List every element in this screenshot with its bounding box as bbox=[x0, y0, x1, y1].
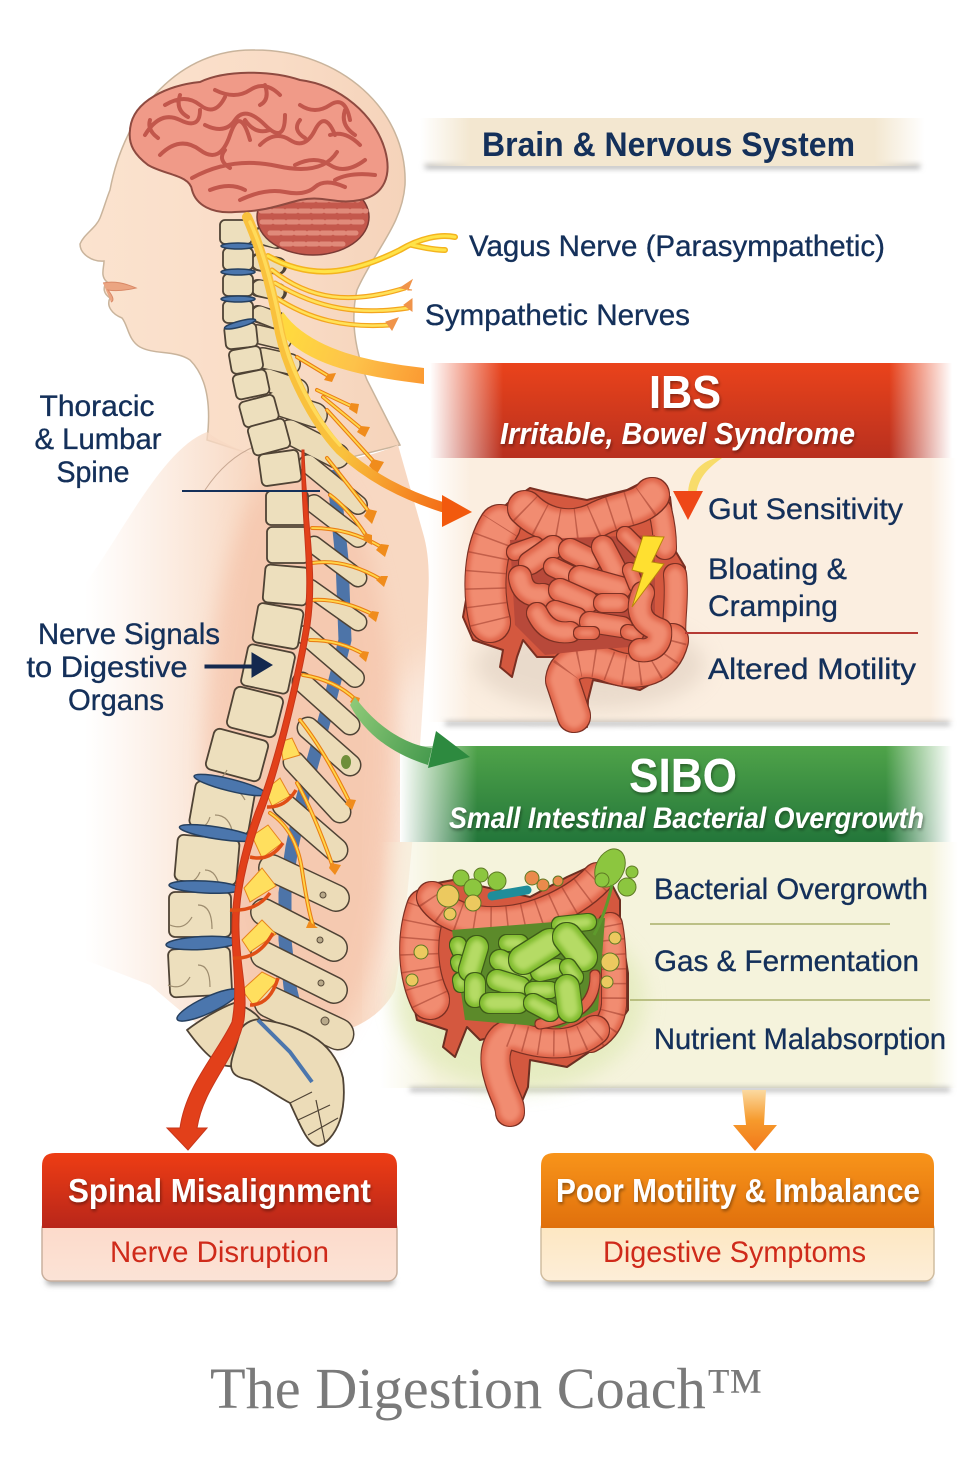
header shadow bbox=[425, 165, 920, 168]
bacteria loops bbox=[458, 922, 588, 1012]
symptom: cramping: Cramping bbox=[708, 590, 838, 623]
callout shadow bbox=[46, 1276, 394, 1285]
divider bbox=[685, 632, 918, 634]
lips bbox=[103, 282, 136, 302]
small intestine loops bbox=[515, 535, 660, 650]
IBS panel body bbox=[428, 458, 956, 722]
label: nerve signals: to Digestive bbox=[26, 651, 188, 684]
label: nerve signals: Organs bbox=[68, 684, 164, 717]
shoulder contour bbox=[205, 440, 280, 490]
label: thoracic and lumbar spine: Spine bbox=[56, 456, 130, 489]
IBS list bbox=[708, 493, 916, 686]
label: nerve signals: Nerve Signals bbox=[38, 618, 220, 651]
brain bbox=[130, 73, 388, 255]
arrow head to intestine bbox=[442, 495, 472, 527]
symptom: bacterial overgrowth: Bacterial Overgrowth bbox=[654, 873, 928, 906]
callout title: Poor Motility & Imbalance bbox=[556, 1172, 920, 1209]
symptom: bloating and cramping: Bloating & bbox=[708, 553, 847, 586]
dividers bbox=[630, 924, 930, 1000]
right torso fade bbox=[380, 640, 440, 1040]
thoracic nerve branches bbox=[270, 357, 383, 925]
icon: lightning bolt bbox=[632, 536, 664, 607]
panel: brain header bbox=[420, 118, 925, 168]
SIBO header fade bbox=[400, 746, 952, 842]
leader line: spine bbox=[182, 490, 320, 492]
main nerve arrow to IBS bbox=[247, 217, 442, 507]
intestine silhouette bbox=[463, 480, 685, 730]
process foramina bbox=[317, 892, 329, 1025]
SIBO title: SIBO bbox=[629, 750, 737, 803]
spinous process fill bbox=[257, 236, 358, 1034]
callout header bbox=[42, 1153, 397, 1228]
callout: spinal misalignment bbox=[42, 1153, 397, 1285]
large intestine frame bbox=[485, 495, 676, 716]
symptom: gut sensitivity: Gut Sensitivity bbox=[708, 493, 903, 526]
spinous processes bbox=[257, 236, 358, 1034]
SIBO panel shadow bbox=[410, 1088, 950, 1091]
spinal canal blue cord bbox=[285, 470, 345, 1020]
vertebra surface cracks bbox=[168, 770, 245, 987]
sympathetic nerve fibres bbox=[272, 270, 412, 330]
callout body bbox=[42, 1220, 397, 1281]
band toward IBS panel bbox=[275, 312, 424, 384]
symptom: nutrient malabsorption: Nutrient Malabsorption bbox=[654, 1023, 946, 1056]
IBS title: IBS bbox=[649, 366, 721, 418]
spine bbox=[166, 220, 389, 1150]
yellow nerve roots between vertebrae bbox=[242, 738, 300, 1006]
label: vagus: Vagus Nerve (Parasympathetic) bbox=[469, 230, 885, 263]
cerebrum bbox=[130, 73, 388, 212]
label: thoracic and lumbar spine: Thoracic bbox=[40, 390, 154, 423]
IBS subtitle: Irritable, Bowel Syndrome bbox=[500, 416, 855, 451]
small intestine cavity bbox=[510, 535, 655, 655]
vagus nerve bbox=[268, 236, 455, 272]
arrow: nerve signals bbox=[205, 653, 272, 677]
callout subtitle: Nerve Disruption bbox=[110, 1236, 329, 1269]
IBS panel shadow bbox=[445, 722, 950, 725]
header bar bbox=[420, 118, 925, 166]
bacteria cavity bbox=[452, 918, 605, 1028]
heading: Brain & Nervous System bbox=[482, 126, 855, 164]
callout header bbox=[541, 1153, 934, 1228]
panel: IBS bbox=[428, 363, 956, 730]
icon: SIBO intestines bbox=[405, 844, 638, 1123]
shadow skin tone behind spine bbox=[205, 460, 395, 1060]
green halo bbox=[395, 910, 645, 1090]
IBS header bbox=[430, 363, 952, 458]
torso silhouette bbox=[80, 432, 429, 1042]
SIBO subtitle: Small Intestinal Bacterial Overgrowth bbox=[449, 802, 924, 835]
inner small bowel bbox=[540, 975, 595, 1024]
callout subtitle: Digestive Symptoms bbox=[603, 1236, 866, 1269]
intestine silhouette bbox=[405, 862, 628, 1123]
surface bacteria clusters bbox=[406, 844, 638, 988]
yellow pointer arc bbox=[688, 458, 722, 495]
head and neck silhouette bbox=[80, 50, 405, 470]
vertebral bodies bbox=[168, 220, 310, 998]
arrow: orange down bbox=[733, 1090, 777, 1151]
callout shadow bbox=[545, 1276, 931, 1285]
nerve bundle from brain stem bbox=[247, 217, 472, 527]
cerebellum bbox=[257, 179, 369, 255]
intestine shadow bbox=[475, 620, 705, 710]
intervertebral discs bbox=[166, 243, 267, 1027]
SIBO list bbox=[654, 873, 946, 1056]
label: thoracic and lumbar spine: & Lumbar bbox=[34, 423, 162, 456]
symptom: altered motility: Altered Motility bbox=[708, 653, 916, 686]
red pointer bbox=[673, 491, 703, 520]
label: sympathetic: Sympathetic Nerves bbox=[425, 299, 690, 332]
sacrum and coccyx bbox=[187, 1003, 344, 1146]
callout title: Spinal Misalignment bbox=[68, 1172, 371, 1209]
IBS header fade bbox=[430, 363, 952, 458]
footer brand: The Digestion Coach™ bbox=[210, 1356, 763, 1421]
symptom: gas and fermentation: Gas & Fermentation bbox=[654, 945, 919, 978]
spinal cord red with tapered arrow bbox=[167, 450, 313, 1150]
callout body bbox=[541, 1220, 934, 1281]
lumbar red nerve branches bbox=[230, 790, 296, 1005]
icon: IBS intestines bbox=[463, 480, 685, 730]
callout: poor motility bbox=[541, 1153, 934, 1285]
label: nerve signals bbox=[26, 618, 220, 717]
arrow: green to SIBO bbox=[350, 697, 470, 768]
large intestine frame bbox=[419, 878, 614, 1112]
label: thoracic and lumbar spine bbox=[34, 390, 162, 489]
main nerve highlight bbox=[250, 222, 340, 445]
nerve branch tips bbox=[306, 373, 389, 928]
panel: SIBO bbox=[380, 746, 958, 1123]
SIBO panel body bbox=[380, 842, 958, 1088]
SIBO header bbox=[400, 746, 952, 842]
